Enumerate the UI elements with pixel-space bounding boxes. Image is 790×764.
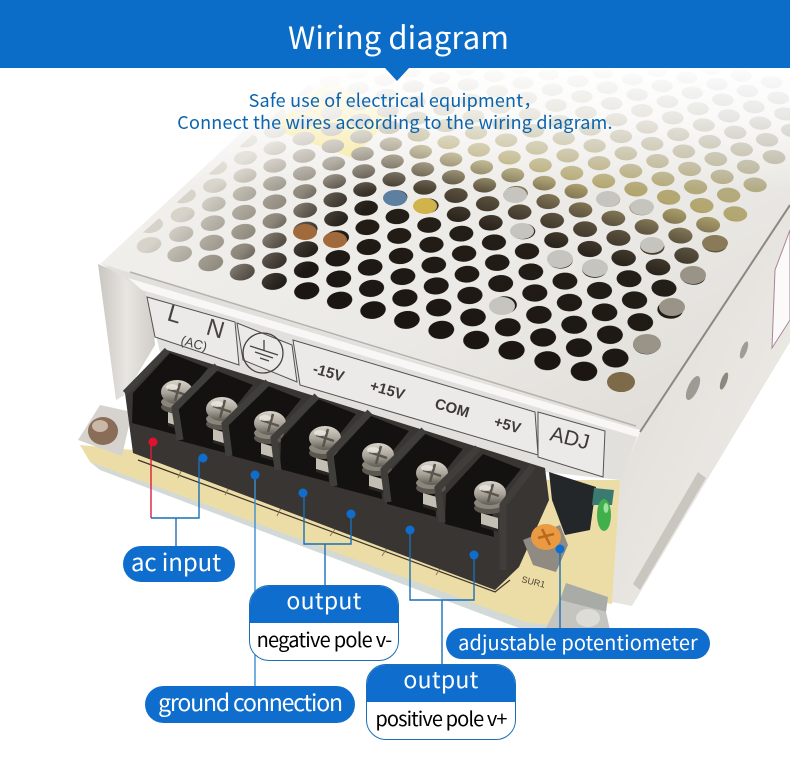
label: output voltages: +15V bbox=[368, 378, 407, 404]
line: ground connection bbox=[250, 470, 260, 686]
header pointer bbox=[385, 68, 409, 81]
label: L N AC: N bbox=[203, 314, 227, 345]
callout: ac input: ac input bbox=[131, 543, 221, 578]
label: L N AC: (AC) bbox=[179, 332, 209, 354]
callout: output positive pole: positive pole v+ bbox=[375, 703, 507, 732]
electronics: capacitor, LED, potentiometer: SUR1 bbox=[521, 574, 546, 590]
subtitle bbox=[177, 87, 613, 135]
line: potentiometer bbox=[556, 544, 564, 628]
label: output voltages: +5V bbox=[492, 414, 523, 437]
circuit board bbox=[80, 445, 620, 650]
label: ADJ bbox=[538, 412, 605, 477]
left mounting screw tab bbox=[78, 405, 132, 456]
line: positive output bracket bbox=[406, 526, 478, 664]
label: ADJ: ADJ bbox=[548, 423, 592, 454]
right mounting tab bbox=[545, 583, 610, 630]
front plate bbox=[102, 264, 640, 480]
left flange bbox=[98, 264, 155, 400]
label: ground symbol bbox=[237, 323, 297, 382]
label: L N AC bbox=[147, 297, 239, 365]
header band bbox=[0, 0, 790, 68]
subtitle: Safe use of electrical equipment， bbox=[249, 87, 541, 113]
callout: output negative pole: negative pole v- bbox=[257, 624, 391, 653]
label: output voltages: COM bbox=[433, 396, 471, 421]
electronics: capacitor, LED, potentiometer bbox=[521, 472, 614, 590]
top fade bbox=[0, 68, 790, 190]
terminal block bbox=[125, 350, 549, 590]
callout: adjustable potentiometer: adjustable potentiometer bbox=[458, 627, 698, 656]
callout: output negative pole bbox=[249, 585, 399, 661]
side panel bbox=[612, 205, 790, 606]
label: output voltages: -15V bbox=[311, 361, 346, 386]
callout: ground connection: ground connection bbox=[158, 684, 342, 718]
title: Wiring diagram bbox=[288, 13, 509, 58]
line: ac input bracket bbox=[148, 438, 208, 546]
line: negative output bracket bbox=[298, 488, 356, 585]
label: output voltages bbox=[293, 340, 538, 455]
coloured holes showing internal parts bbox=[293, 187, 728, 392]
label: L N AC: L bbox=[164, 300, 185, 329]
callout: ac input bbox=[123, 546, 235, 582]
perforated holes in the cover bbox=[136, 78, 790, 392]
callout: output positive pole bbox=[366, 664, 516, 740]
subtitle: Connect the wires according to the wiring diagram. bbox=[177, 109, 613, 135]
